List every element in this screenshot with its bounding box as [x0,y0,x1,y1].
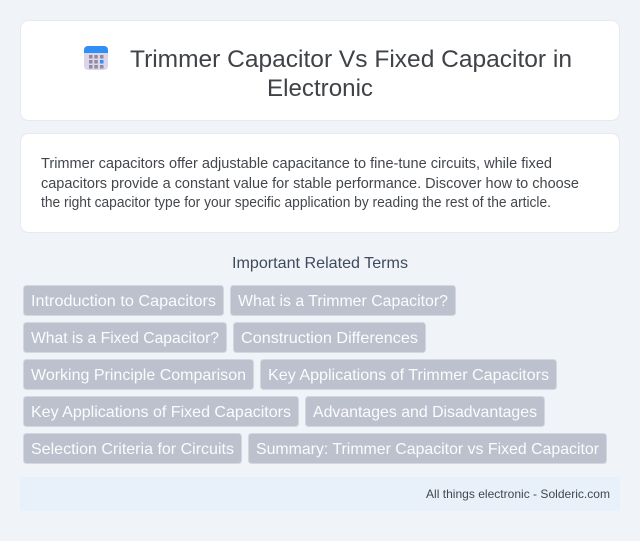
tag: Summary: Trimmer Capacitor vs Fixed Capacitor [248,434,606,464]
tag: What is a Fixed Capacitor?: What is a Fixed Capacitor? [31,330,219,347]
tag: What is a Fixed Capacitor? [24,322,226,352]
tag: Advantages and Disadvantages [306,396,544,426]
tag: Key Applications of Fixed Capacitors [24,396,298,426]
tag: Introduction to Capacitors [24,286,224,316]
text block: intro: capacitors provide a constant value for stable performance. Discover how to choose [41,176,579,192]
tag: Working Principle Comparison: Working Principle Comparison [31,367,246,384]
footer text: All things electronic - Solderic.com [426,487,610,501]
tag: Summary: Trimmer Capacitor vs Fixed Capacitor: Summary: Trimmer Capacitor vs Fixed Capacitor [256,441,600,458]
text block: intro: Trimmer capacitors offer adjustable capacitance to fine-tune circuits, while fixed [41,156,552,172]
tag list [24,286,606,464]
tag: What is a Trimmer Capacitor? [230,286,456,316]
tag: Key Applications of Trimmer Capacitors [260,360,556,390]
panel: intro text [20,134,620,232]
tag: Introduction to Capacitors: Introduction to Capacitors [31,293,216,310]
icon: calendar [84,46,108,70]
text block: intro: the right capacitor type for your specific application by reading the rest of the article. [41,195,551,211]
tag: Construction Differences [234,322,426,352]
panel: header [20,20,620,120]
title: Trimmer Capacitor Vs Fixed Capacitor in [130,46,572,73]
tag: What is a Trimmer Capacitor?: What is a Trimmer Capacitor? [238,293,448,310]
tag: Key Applications of Fixed Capacitors: Key Applications of Fixed Capacitors [31,404,291,421]
tag: Selection Criteria for Circuits: Selection Criteria for Circuits [31,441,234,458]
title [130,46,572,102]
title: Electronic [267,75,373,102]
tag: Construction Differences: Construction Differences [241,330,418,347]
heading: related terms: Important Related Terms [232,255,408,272]
tag: Key Applications of Trimmer Capacitors: Key Applications of Trimmer Capacitors [268,367,549,384]
text block: intro [41,156,579,211]
footer [20,477,620,511]
tag: Selection Criteria for Circuits [24,434,242,464]
tag: Working Principle Comparison [24,360,254,390]
tag: Advantages and Disadvantages: Advantages and Disadvantages [313,404,537,421]
